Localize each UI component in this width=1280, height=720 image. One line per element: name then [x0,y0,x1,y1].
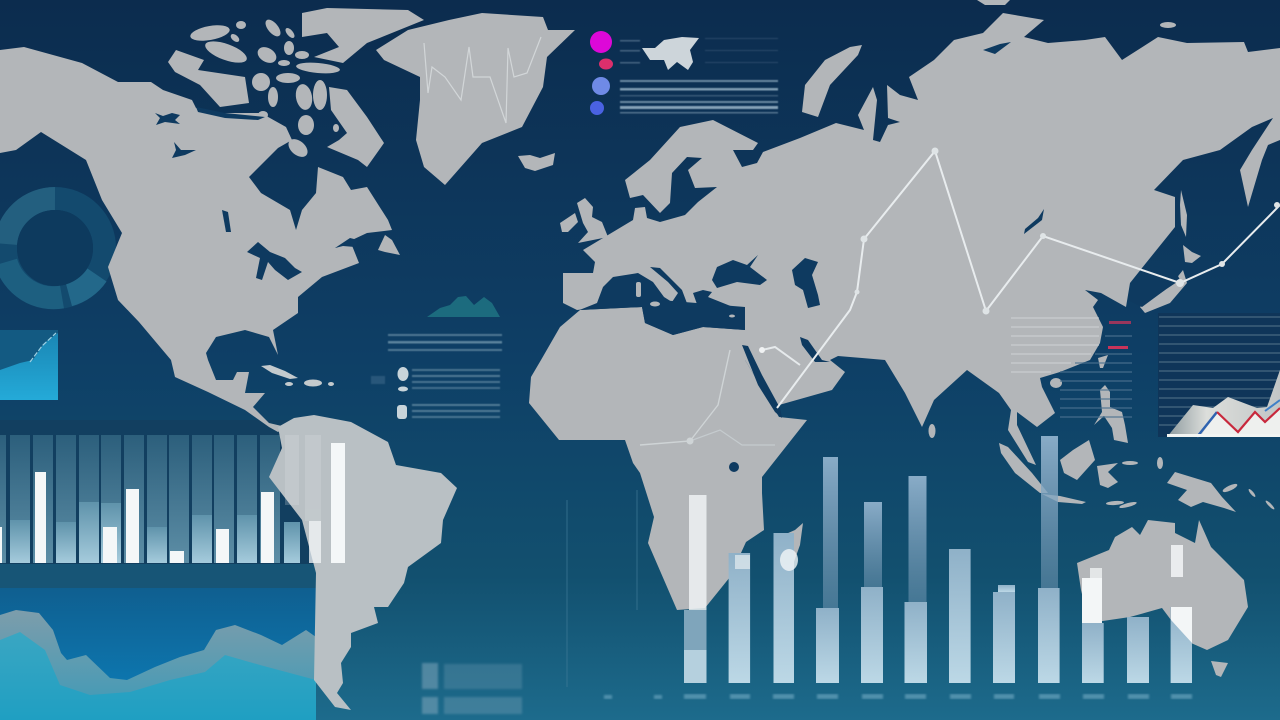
blue marker [590,101,604,115]
Madagascar [779,523,803,570]
column backgrounds [0,435,280,563]
lighter column values [10,502,300,563]
Arctic Russia islands [977,0,1176,28]
mini map fragment [642,37,699,70]
panel: bottom blurred data block [422,663,522,714]
upper translucent bars [823,436,1058,608]
light blue marker [592,77,610,95]
column chart: white highlight bars [0,443,345,563]
Arctic channels [196,107,265,120]
Sri Lanka and Hainan [928,378,1062,438]
sea stripes [1060,335,1132,418]
Lake Baikal [1024,209,1044,234]
Britain and Ireland [560,198,608,243]
mountain silhouette [427,296,500,317]
data dots [397,367,408,419]
data stripes [371,334,502,418]
panel: column chart background [0,420,316,588]
panel: center data block [371,296,502,419]
line chart: Greenland trace [424,37,541,123]
white highlight segments [735,545,1192,643]
blue line right [1265,400,1280,411]
Caspian Sea [792,258,820,308]
Great Slave Lake [172,142,196,158]
Great Bear Lake [155,113,180,125]
panel: right mini chart [1158,313,1280,437]
Iceland [518,153,555,171]
lower solid bars [729,533,1192,683]
Africa [529,307,807,610]
Greenland [376,13,575,185]
Sakhalin, Hokkaido and Japan [1140,190,1201,313]
red line [1217,408,1280,432]
Taymyr channels [983,42,1011,54]
column chart: translucent overlays on South America [285,435,321,521]
Black Sea [712,255,767,288]
donut segment: top left [6,198,55,244]
blue line [1197,412,1217,437]
Australia [1077,520,1248,650]
Caribbean islands [261,365,334,386]
light stripes on land [1011,317,1099,373]
vertical axis lines [567,490,637,687]
panel: stripes over East Asia [1011,317,1132,418]
Lake Winnipeg [222,210,231,232]
area [1167,370,1280,437]
donut segment: bottom right [69,275,97,295]
panel: legend with circles [590,31,778,115]
Southeast Asian islands [999,355,1275,512]
Mediterranean islands [636,282,735,318]
Great Lakes [247,242,302,280]
Eurasia [563,13,1280,465]
Red Sea [742,345,782,418]
stripes [1159,316,1280,426]
Arctic islands [168,8,424,255]
bar 1 [684,495,706,683]
South America [269,415,457,710]
Novaya Zemlya [802,45,862,117]
Persian Gulf [800,337,830,362]
line chart: route across Eurasia [777,148,1280,408]
red marker [599,58,613,70]
seas and lakes [155,42,1180,472]
line chart: Arabia and Africa trace [640,347,800,445]
bottom bar chart [684,436,1192,683]
Mediterranean Sea [577,267,745,335]
North America [0,47,392,432]
panel: small area chart [0,330,58,400]
panel: blue area chart [0,588,316,720]
Tasmania [1211,661,1228,677]
Gulf of St Lawrence [335,238,358,248]
panel: donut chart [6,198,104,298]
donut segment: bottom left [6,262,62,298]
Sea of Japan [1128,265,1180,307]
bottom axis labels [604,694,1192,699]
magenta marker [590,31,612,53]
Lake Victoria [729,462,739,472]
red dashes [1108,321,1131,349]
legend stripes [620,38,778,114]
